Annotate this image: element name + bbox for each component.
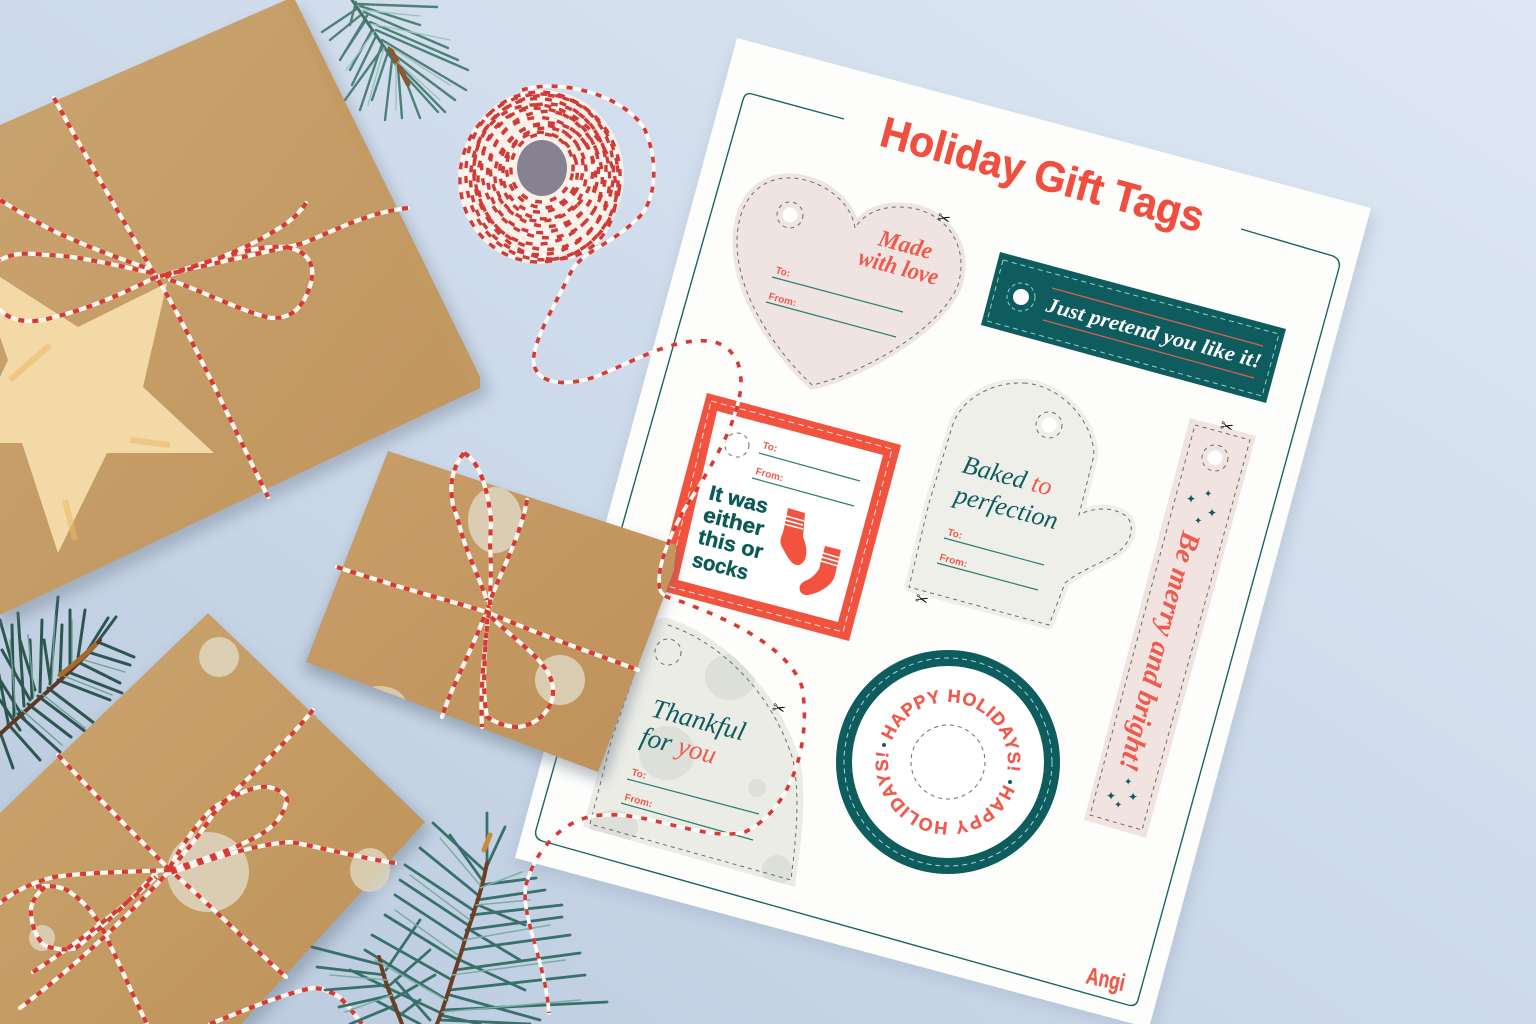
tag: heart: ✂ bbox=[935, 208, 953, 229]
tag: long ribbon: ✦ bbox=[1128, 790, 1138, 804]
tag: heart bbox=[737, 178, 961, 385]
tag: heart: with love bbox=[855, 245, 942, 291]
tag: heart: From: bbox=[767, 291, 797, 309]
panel: printed paper sheet bbox=[515, 38, 1371, 1024]
tag: round happy holidays: HAPPY HOLIDAYS! bbox=[880, 689, 1021, 771]
tag: thankful bell: From: bbox=[623, 792, 653, 810]
tag: mitten: To: bbox=[946, 527, 963, 542]
tag: round happy holidays: HAPPY HOLIDAYS! bbox=[875, 752, 1015, 835]
tag: thankful bell: ✂ bbox=[770, 698, 788, 719]
tag: red square socks: socks bbox=[690, 549, 751, 585]
twine ball bbox=[446, 79, 644, 285]
tag: mitten: Baked to bbox=[959, 450, 1056, 502]
loose twine string bbox=[522, 86, 804, 1013]
tag: long ribbon bbox=[1084, 416, 1256, 838]
page frame line bbox=[536, 94, 1339, 1005]
panel: lower kraft gift box bbox=[0, 613, 432, 1024]
pine branch: left bbox=[0, 597, 134, 768]
tag: red square socks bbox=[655, 393, 901, 641]
tag: teal banner: Just pretend you like it! bbox=[1043, 292, 1264, 373]
tag: red square socks: this or bbox=[696, 526, 765, 564]
tag: thankful bell: for you bbox=[637, 721, 720, 770]
tag: thankful bell: To: bbox=[630, 767, 647, 782]
tag: mitten: From: bbox=[938, 552, 968, 570]
tag: long ribbon: ✦ bbox=[1124, 777, 1132, 788]
tag: teal banner bbox=[981, 252, 1286, 403]
tag: long ribbon: ✦ bbox=[1186, 492, 1196, 506]
tag: heart: Made bbox=[874, 225, 936, 265]
tag: long ribbon: ✦ bbox=[1207, 506, 1217, 520]
logo: Angi: Angi bbox=[1084, 962, 1128, 997]
tag: red square socks: either bbox=[701, 504, 767, 541]
tag: red square socks: From: bbox=[754, 466, 784, 484]
tag: mitten: perfection bbox=[950, 479, 1061, 535]
panel: large kraft gift box bbox=[0, 0, 488, 625]
tag: long ribbon: ✦ bbox=[1114, 800, 1122, 811]
icon: sock one bbox=[780, 508, 806, 565]
tag: mitten bbox=[909, 383, 1131, 625]
tag: red square socks: It was bbox=[707, 482, 771, 518]
panel: middle kraft gift box bbox=[302, 451, 680, 782]
icon: sock two bbox=[800, 546, 841, 595]
wooden star ornament bbox=[0, 277, 214, 553]
tag: red square socks: To: bbox=[761, 440, 778, 455]
paper shadow bbox=[512, 45, 1376, 1024]
tag: long ribbon: Be merry and bright! bbox=[1112, 527, 1206, 775]
pine branch: bottom bbox=[312, 813, 607, 1024]
tag: long ribbon: ✦ bbox=[1204, 489, 1212, 500]
tag: long ribbon: ✦ bbox=[1194, 516, 1202, 527]
tag: round happy holidays bbox=[836, 650, 1060, 874]
title: Holiday Gift Tags bbox=[875, 108, 1209, 242]
tag: long ribbon: ✂ bbox=[1218, 416, 1236, 437]
twine on large gift bbox=[0, 98, 408, 497]
tag: mitten: ✂ bbox=[913, 589, 931, 610]
tag: thankful bell bbox=[583, 618, 803, 887]
tag: thankful bell: Thankful bbox=[648, 693, 749, 747]
tag: long ribbon: ✦ bbox=[1106, 789, 1116, 803]
tag: heart: To: bbox=[774, 265, 791, 280]
pine branch: top bbox=[322, 0, 468, 120]
